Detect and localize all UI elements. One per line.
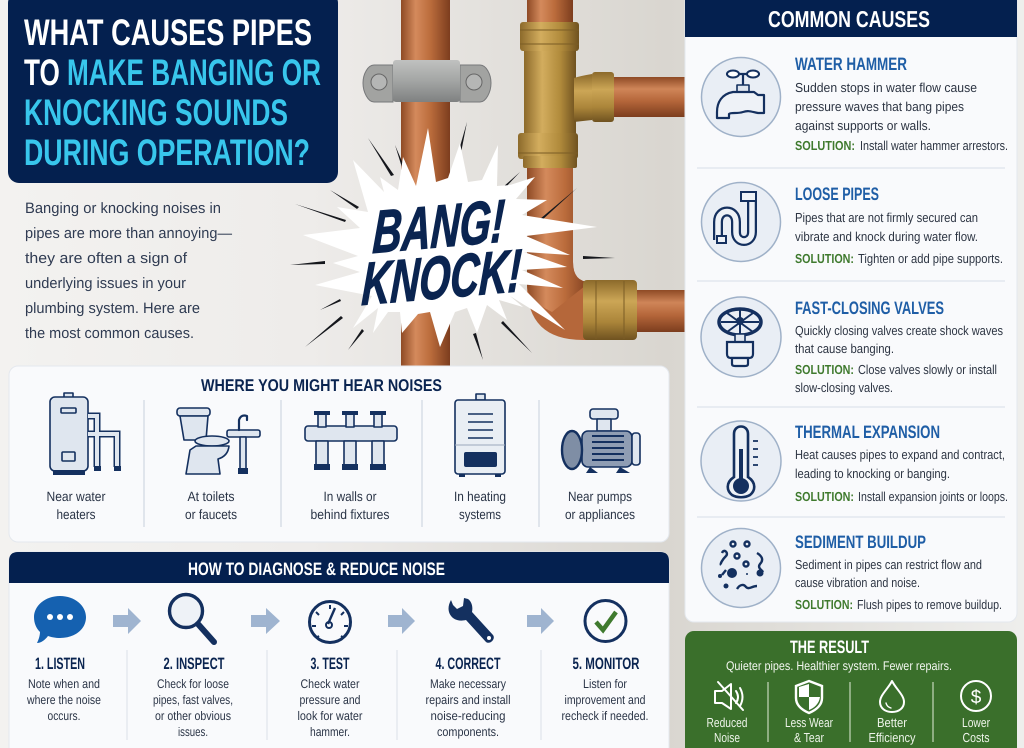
labels: locations: In walls or xyxy=(324,489,377,504)
cause: fast-closing valves: SOLUTION: xyxy=(795,362,854,377)
labels: locations: heaters xyxy=(56,507,96,522)
cause: sediment buildup: cause vibration and noise. xyxy=(795,575,920,590)
cause: fast-closing valves: that cause banging. xyxy=(795,341,894,356)
step 1: occurs. xyxy=(48,709,80,723)
title block: WHAT CAUSES PIPES xyxy=(24,12,312,53)
cause: water hammer: Sudden stops in water flow cause xyxy=(795,80,977,95)
intro paragraph: Banging or knocking noises in xyxy=(25,200,221,217)
step 1 xyxy=(26,655,101,723)
panel: common causes xyxy=(685,0,1017,622)
step 1: Note when and xyxy=(28,677,100,691)
icon: p-trap pipe xyxy=(702,182,780,262)
cause: fast-closing valves: FAST-CLOSING VALVES xyxy=(795,298,944,318)
cause: loose pipes: SOLUTION: xyxy=(795,251,854,266)
title block xyxy=(8,0,338,183)
cause: sediment buildup xyxy=(702,528,1002,612)
step 4 xyxy=(426,655,510,739)
labels: locations: Near pumps xyxy=(568,489,632,504)
bang knock text: KNOCK! xyxy=(360,237,523,318)
heading: where you might hear noises: WHERE YOU MIGHT HEAR NOISES xyxy=(201,376,442,395)
labels: benefits: Lower xyxy=(962,715,991,730)
intro paragraph: the most common causes. xyxy=(25,325,194,342)
cause: water hammer: WATER HAMMER xyxy=(795,54,907,74)
intro paragraph: pipes are more than annoying— xyxy=(25,225,232,242)
labels: benefits xyxy=(706,715,991,745)
cause: loose pipes: Pipes that are not firmly secured can xyxy=(795,210,978,225)
icon: heating system xyxy=(455,394,505,477)
intro paragraph: plumbing system. Here are xyxy=(25,300,200,317)
labels: benefits: & Tear xyxy=(794,730,825,745)
icon: wrench xyxy=(449,598,494,643)
icon: dollar coin xyxy=(961,681,991,711)
labels: locations: or faucets xyxy=(185,507,237,522)
icon: pressure gauge xyxy=(310,602,350,642)
icon: muted speaker xyxy=(715,682,743,710)
cause: water hammer: SOLUTION: xyxy=(795,138,855,153)
cause: water hammer xyxy=(702,54,1008,153)
step 5: improvement and xyxy=(564,693,646,707)
step 1: where the noise xyxy=(26,693,101,707)
icon: speech bubble xyxy=(34,596,86,643)
labels: benefits: Costs xyxy=(962,730,990,745)
step 4: repairs and install xyxy=(426,693,510,707)
cause: sediment buildup: Sediment in pipes can restrict flow and xyxy=(795,557,982,572)
step 2: issues. xyxy=(178,725,208,739)
cause: loose pipes xyxy=(702,182,1003,266)
labels: locations xyxy=(46,489,635,522)
cause: sediment buildup: SEDIMENT BUILDUP xyxy=(795,532,926,552)
labels: benefits: Reduced xyxy=(706,715,748,730)
icon: dollar coin: $ xyxy=(971,687,982,708)
labels: locations: behind fixtures xyxy=(310,507,390,522)
arrow xyxy=(251,608,280,634)
title block: DURING OPERATION? xyxy=(24,132,310,173)
step 5: recheck if needed. xyxy=(562,709,648,723)
labels: locations: or appliances xyxy=(565,507,635,522)
icon: valve wheel xyxy=(701,297,781,377)
arrow xyxy=(527,608,554,634)
panel: how to diagnose and reduce noise xyxy=(9,552,669,748)
labels: locations: In heating xyxy=(454,489,506,504)
arrow xyxy=(113,608,141,634)
icon: shield xyxy=(796,681,822,713)
step 2 xyxy=(153,655,233,739)
cause: fast-closing valves xyxy=(701,297,1003,395)
intro paragraph: underlying issues in your xyxy=(25,275,186,292)
step 3: look for water xyxy=(298,709,362,723)
step 4: 4. CORRECT xyxy=(436,655,500,673)
cause: thermal expansion: SOLUTION: xyxy=(795,489,854,504)
bang knock text: BANG! xyxy=(371,187,506,266)
heading: how to diagnose: HOW TO DIAGNOSE & REDUCE NOISE xyxy=(188,559,445,579)
heading: common causes: COMMON CAUSES xyxy=(768,6,930,32)
title block: KNOCKING SOUNDS xyxy=(24,92,288,133)
icon: faucet xyxy=(702,58,780,136)
step 4: Make necessary xyxy=(430,677,507,691)
step 5: Listen for xyxy=(583,677,627,691)
step 2: or other obvious xyxy=(155,709,231,723)
cause: fast-closing valves: slow-closing valves. xyxy=(795,380,893,395)
intro paragraph: they are often a sign of xyxy=(25,250,188,267)
step 3: hammer. xyxy=(310,725,350,739)
labels: benefits: Better xyxy=(877,715,908,730)
icon: check circle xyxy=(585,600,626,642)
tagline: Quieter pipes. Healthier system. Fewer repairs. xyxy=(726,659,952,673)
step 3: Check water xyxy=(300,677,360,691)
icon: sediment particles xyxy=(702,528,780,608)
cause: water hammer: against supports or walls. xyxy=(795,118,931,133)
arrow xyxy=(388,608,415,634)
bang knock text xyxy=(360,187,523,318)
cause: thermal expansion xyxy=(701,421,1008,504)
step 5: 5. MONITOR xyxy=(572,655,640,673)
cause: fast-closing valves: Close valves slowly or install xyxy=(858,362,997,377)
cause: thermal expansion: leading to knocking or banging. xyxy=(795,466,950,481)
labels: benefits: Less Wear xyxy=(785,715,834,730)
icon: water drop xyxy=(880,681,904,712)
heading: the result: THE RESULT xyxy=(790,637,869,657)
icon: magnifier xyxy=(170,594,214,642)
intro paragraph xyxy=(25,200,232,342)
illustration: copper pipes and brass fittings xyxy=(363,0,686,366)
labels: benefits: Efficiency xyxy=(868,730,916,745)
step 2: 2. INSPECT xyxy=(164,655,224,673)
step 2: Check for loose xyxy=(157,677,229,691)
step 3: pressure and xyxy=(300,693,361,707)
icon: water heater xyxy=(50,393,121,475)
cause: sediment buildup: SOLUTION: xyxy=(795,597,853,612)
step 4: components. xyxy=(437,725,499,739)
panel: where you might hear noises xyxy=(9,366,669,542)
labels: benefits: Noise xyxy=(714,730,740,745)
icon: manifold xyxy=(305,412,397,469)
labels: locations: At toilets xyxy=(188,489,235,504)
cause: thermal expansion: THERMAL EXPANSION xyxy=(795,422,940,442)
labels: locations: systems xyxy=(459,507,501,522)
step 4: noise-reducing xyxy=(430,709,506,723)
cause: loose pipes: vibrate and knock during water flow. xyxy=(795,229,978,244)
icon: thermometer xyxy=(701,421,781,501)
step 3: 3. TEST xyxy=(310,655,350,673)
cause: water hammer: pressure waves that bang pipes xyxy=(795,99,964,114)
impact speed lines xyxy=(290,122,615,360)
labels: locations: Near water xyxy=(46,489,106,504)
starburst xyxy=(303,128,597,347)
icon: toilet and faucet xyxy=(177,408,260,474)
cause: loose pipes: LOOSE PIPES xyxy=(795,184,879,204)
step 3 xyxy=(298,655,362,739)
step 1: 1. LISTEN xyxy=(35,655,85,673)
title block: TO MAKE BANGING OR xyxy=(24,52,321,93)
panel: the result xyxy=(685,631,1017,748)
icon: pump xyxy=(562,409,640,473)
step 2: pipes, fast valves, xyxy=(153,693,233,707)
cause: loose pipes: Tighten or add pipe supports. xyxy=(858,251,1003,266)
step 5 xyxy=(562,655,648,723)
